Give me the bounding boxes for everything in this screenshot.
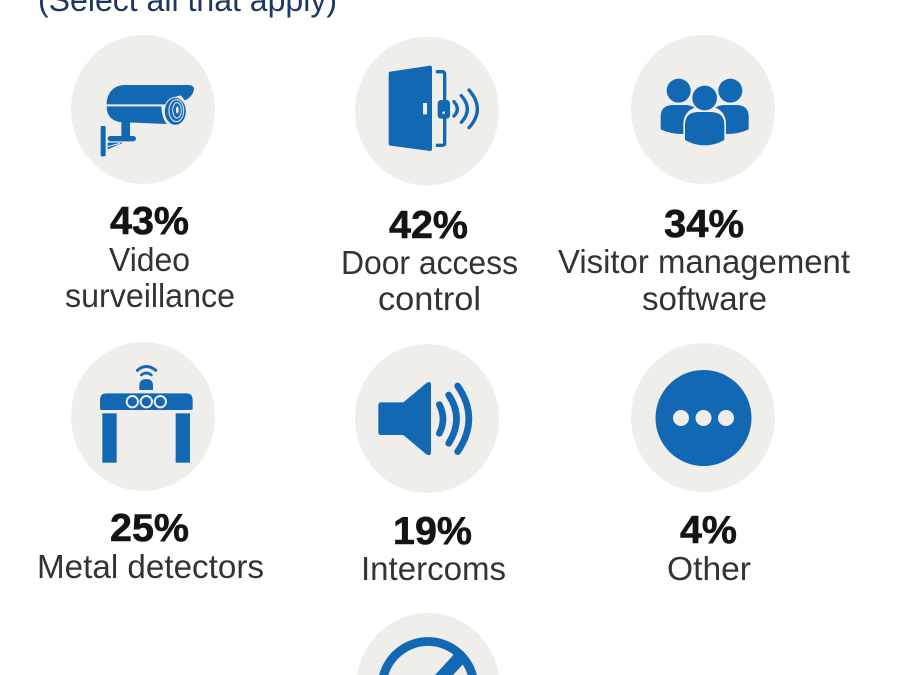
item: metal detectors [37,342,264,586]
label: door access control: Door access [341,245,518,282]
icon: group of people [631,35,775,184]
value: 34%: 34% [664,203,744,246]
label: video surveillance [65,242,235,315]
value: 42%: 42% [389,204,468,247]
value: 25%: 25% [110,507,189,550]
label: metal detectors: Metal detectors [37,549,264,586]
icon: walk-through metal detector [71,342,215,491]
icon: three dots in circle [631,343,775,492]
item: other [631,343,775,588]
label: video surveillance: surveillance [65,278,235,315]
value: 4%: 4% [680,509,737,552]
label: visitor management software [558,244,851,318]
label: visitor management software: Visitor management [558,244,851,281]
icon: door with wireless lock [355,36,499,186]
label: other: Other [667,551,751,588]
item: intercoms [355,344,506,588]
value: 43%: 43% [110,200,189,243]
item: video surveillance [65,35,235,315]
item: door access control [341,36,518,318]
item: visitor management software [558,35,851,318]
icon: security camera [71,35,215,184]
icon: none prohibited sign [357,613,499,675]
label: visitor management software: software [642,281,767,318]
label: door access control: control [378,281,481,318]
value: 19%: 19% [393,510,472,553]
icon: speaker [355,344,499,493]
label: video surveillance: Video [109,242,190,279]
label: door access control [341,245,518,318]
label: intercoms: Intercoms [361,551,506,588]
